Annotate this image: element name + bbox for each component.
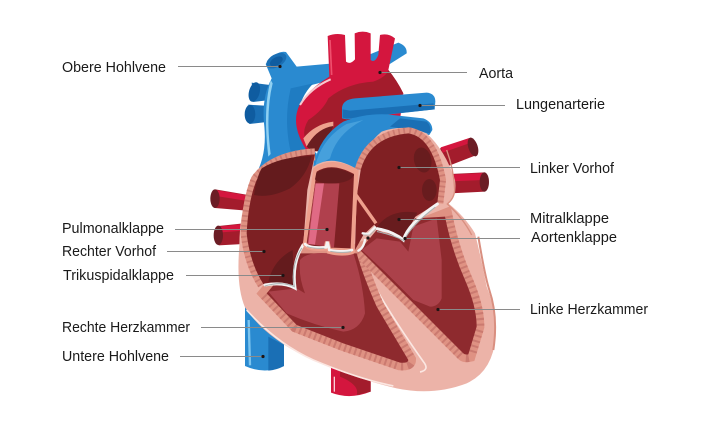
icon: inferior vena cava (245, 300, 284, 371)
label: Rechter Vorhof: Rechter Vorhof (62, 244, 157, 260)
panel: left ventricle (360, 217, 477, 355)
heart illustration (210, 32, 496, 396)
label: Lungenarterie: Lungenarterie (516, 97, 605, 113)
leader dots (261, 65, 440, 358)
panel: myocardium stripes (247, 133, 477, 363)
label: Aorta: Aorta (479, 66, 514, 82)
label: Trikuspidalklappe: Trikuspidalklappe (63, 268, 174, 284)
label: Mitralklappe: Mitralklappe (530, 211, 609, 227)
icon: left pulmonary veins (440, 136, 489, 193)
panel: pulmonary trunk (303, 162, 359, 252)
icon: aortic valve (358, 227, 376, 251)
panel: septum (356, 195, 376, 223)
icon: aorta (296, 32, 403, 153)
panel: right ventricle (267, 253, 408, 363)
panel: right atrium (247, 154, 315, 287)
label: Rechte Herzkammer: Rechte Herzkammer (62, 320, 190, 336)
leader lines (167, 66, 520, 356)
label: Pulmonalklappe: Pulmonalklappe (62, 221, 164, 237)
icon: pulmonary artery back branch (368, 43, 407, 67)
label: Linker Vorhof: Linker Vorhof (530, 161, 615, 177)
panel: left atrium (355, 133, 440, 250)
icon: tricuspid valve (265, 245, 303, 288)
icon: superior vena cava (245, 50, 333, 183)
icon: pulmonary valve (305, 242, 353, 253)
label: Aortenklappe: Aortenklappe (531, 230, 617, 246)
icon: descending aorta (331, 360, 371, 396)
panel: heart wall (238, 128, 496, 391)
label: Untere Hohlvene: Untere Hohlvene (62, 349, 169, 365)
label: Linke Herzkammer: Linke Herzkammer (530, 302, 648, 318)
label: Obere Hohlvene: Obere Hohlvene (62, 60, 166, 76)
icon: pulmonary artery (313, 93, 435, 177)
icon: right pulmonary veins (210, 189, 248, 245)
icon: mitral valve (377, 204, 437, 241)
